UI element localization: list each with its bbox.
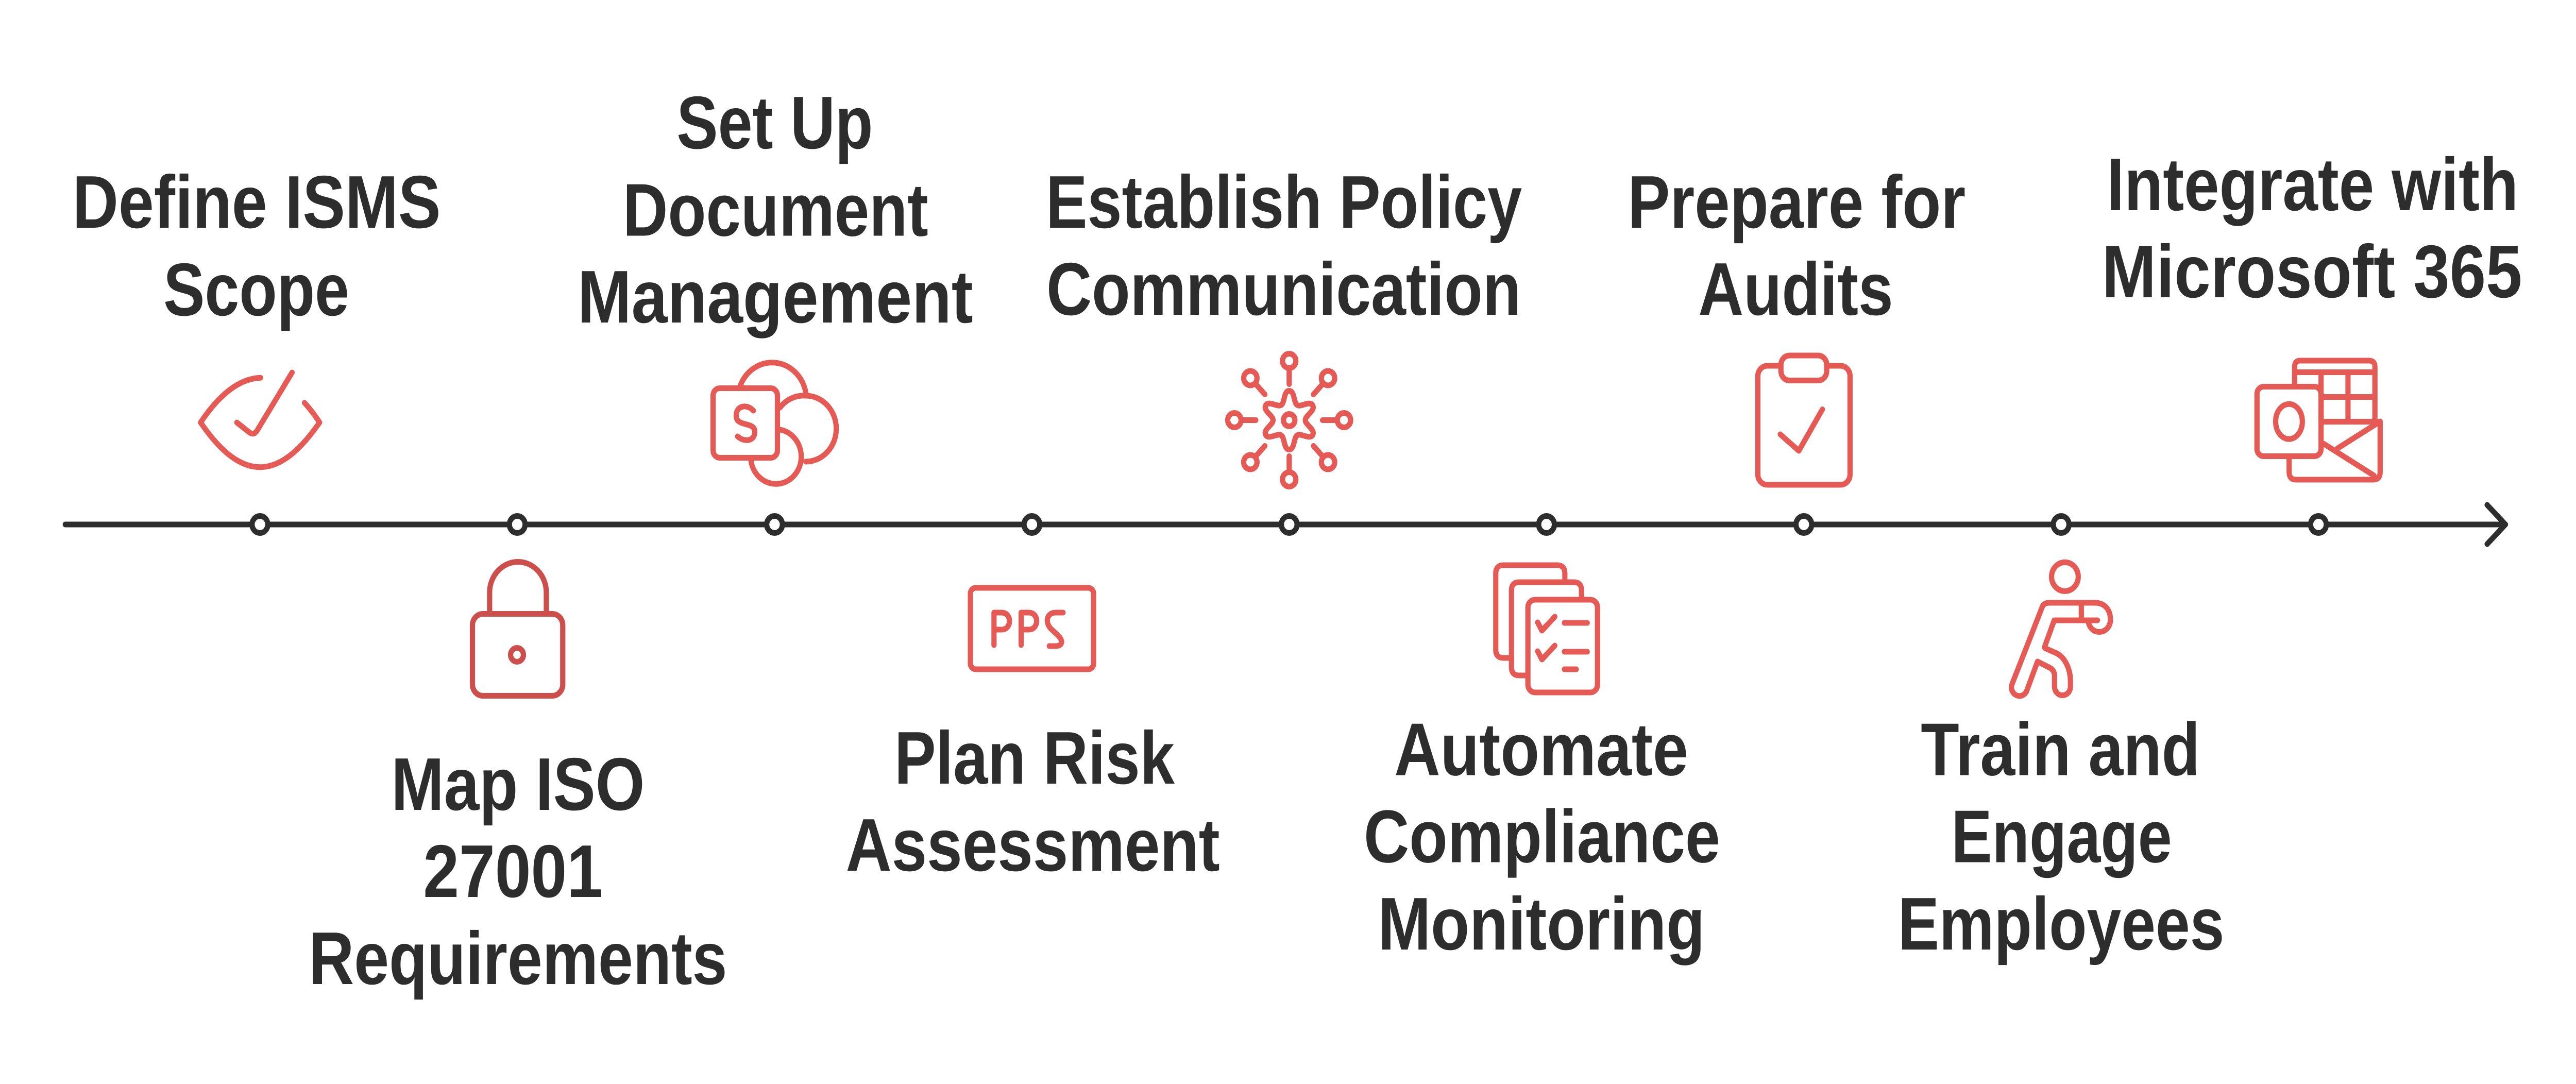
step 6: Automate Compliance Monitoring	[1364, 565, 1720, 966]
heading: Prepare for Audits: Audits	[1698, 247, 1893, 331]
step 4: Plan Risk Assessment	[846, 588, 1220, 887]
step 2: Map ISO 27001 Requirements	[309, 562, 727, 1000]
heading: Integrate with Microsoft 365	[2102, 143, 2522, 313]
heading: Set Up Document Management: Management	[578, 255, 973, 338]
heading: Plan Risk Assessment	[846, 716, 1220, 887]
step 8: Train and Engage Employees	[1898, 562, 2224, 966]
heading: Set Up Document Management	[578, 81, 973, 338]
heading: Set Up Document Management: Set Up	[676, 81, 873, 164]
step 5: Establish Policy Communication	[1046, 160, 1522, 487]
heading: Map ISO 27001 Requirements	[309, 742, 727, 1000]
icon: person in motion	[2011, 562, 2110, 696]
icon: clipboard with check	[1758, 355, 1850, 485]
heading: Map ISO 27001 Requirements: Requirements	[309, 917, 727, 1000]
icon: network gear	[1228, 353, 1351, 486]
heading: Establish Policy Communication: Establish Policy	[1046, 160, 1522, 244]
step 1: Define ISMS Scope	[73, 160, 441, 467]
heading: Establish Policy Communication	[1046, 160, 1522, 331]
icon: SharePoint logo	[713, 363, 836, 484]
heading: Automate Compliance Monitoring: Monitoring	[1378, 882, 1705, 966]
heading: Set Up Document Management: Document	[623, 168, 928, 252]
heading: Plan Risk Assessment: Plan Risk	[894, 716, 1175, 800]
step 9: Integrate with Microsoft 365	[2102, 143, 2522, 480]
step 3: Set Up Document Management	[578, 81, 973, 484]
heading: Train and Engage Employees: Employees	[1898, 882, 2224, 966]
heading: Train and Engage Employees	[1898, 708, 2224, 966]
timeline arrow	[65, 505, 2505, 544]
heading: Prepare for Audits	[1628, 160, 1965, 331]
heading: Plan Risk Assessment: Assessment	[846, 803, 1220, 887]
heading: Map ISO 27001 Requirements: Map ISO	[391, 742, 645, 826]
heading: Prepare for Audits: Prepare for	[1628, 160, 1965, 244]
icon: PPS file badge	[971, 588, 1094, 669]
heading: Automate Compliance Monitoring	[1364, 708, 1720, 966]
heading: Integrate with Microsoft 365: Microsoft 365	[2102, 230, 2522, 313]
heading: Train and Engage Employees: Engage	[1951, 795, 2172, 878]
heading: Automate Compliance Monitoring: Compliance	[1364, 795, 1720, 878]
heading: Integrate with Microsoft 365: Integrate with	[2107, 143, 2518, 226]
step 7: Prepare for Audits	[1628, 160, 1965, 485]
heading: Define ISMS Scope	[73, 160, 441, 331]
heading: Map ISO 27001 Requirements: 27001	[423, 829, 603, 913]
icon: eye with check mark	[200, 372, 319, 467]
heading: Automate Compliance Monitoring: Automate	[1394, 708, 1688, 791]
heading: Train and Engage Employees: Train and	[1921, 708, 2200, 791]
icon: padlock	[472, 562, 563, 696]
heading: Define ISMS Scope: Scope	[163, 248, 349, 331]
heading: Establish Policy Communication: Communication	[1046, 247, 1521, 331]
icon: stacked checklists	[1496, 565, 1598, 692]
heading: Define ISMS Scope: Define ISMS	[73, 160, 441, 244]
icon: Microsoft 365 Outlook and Excel logos	[2257, 361, 2380, 480]
